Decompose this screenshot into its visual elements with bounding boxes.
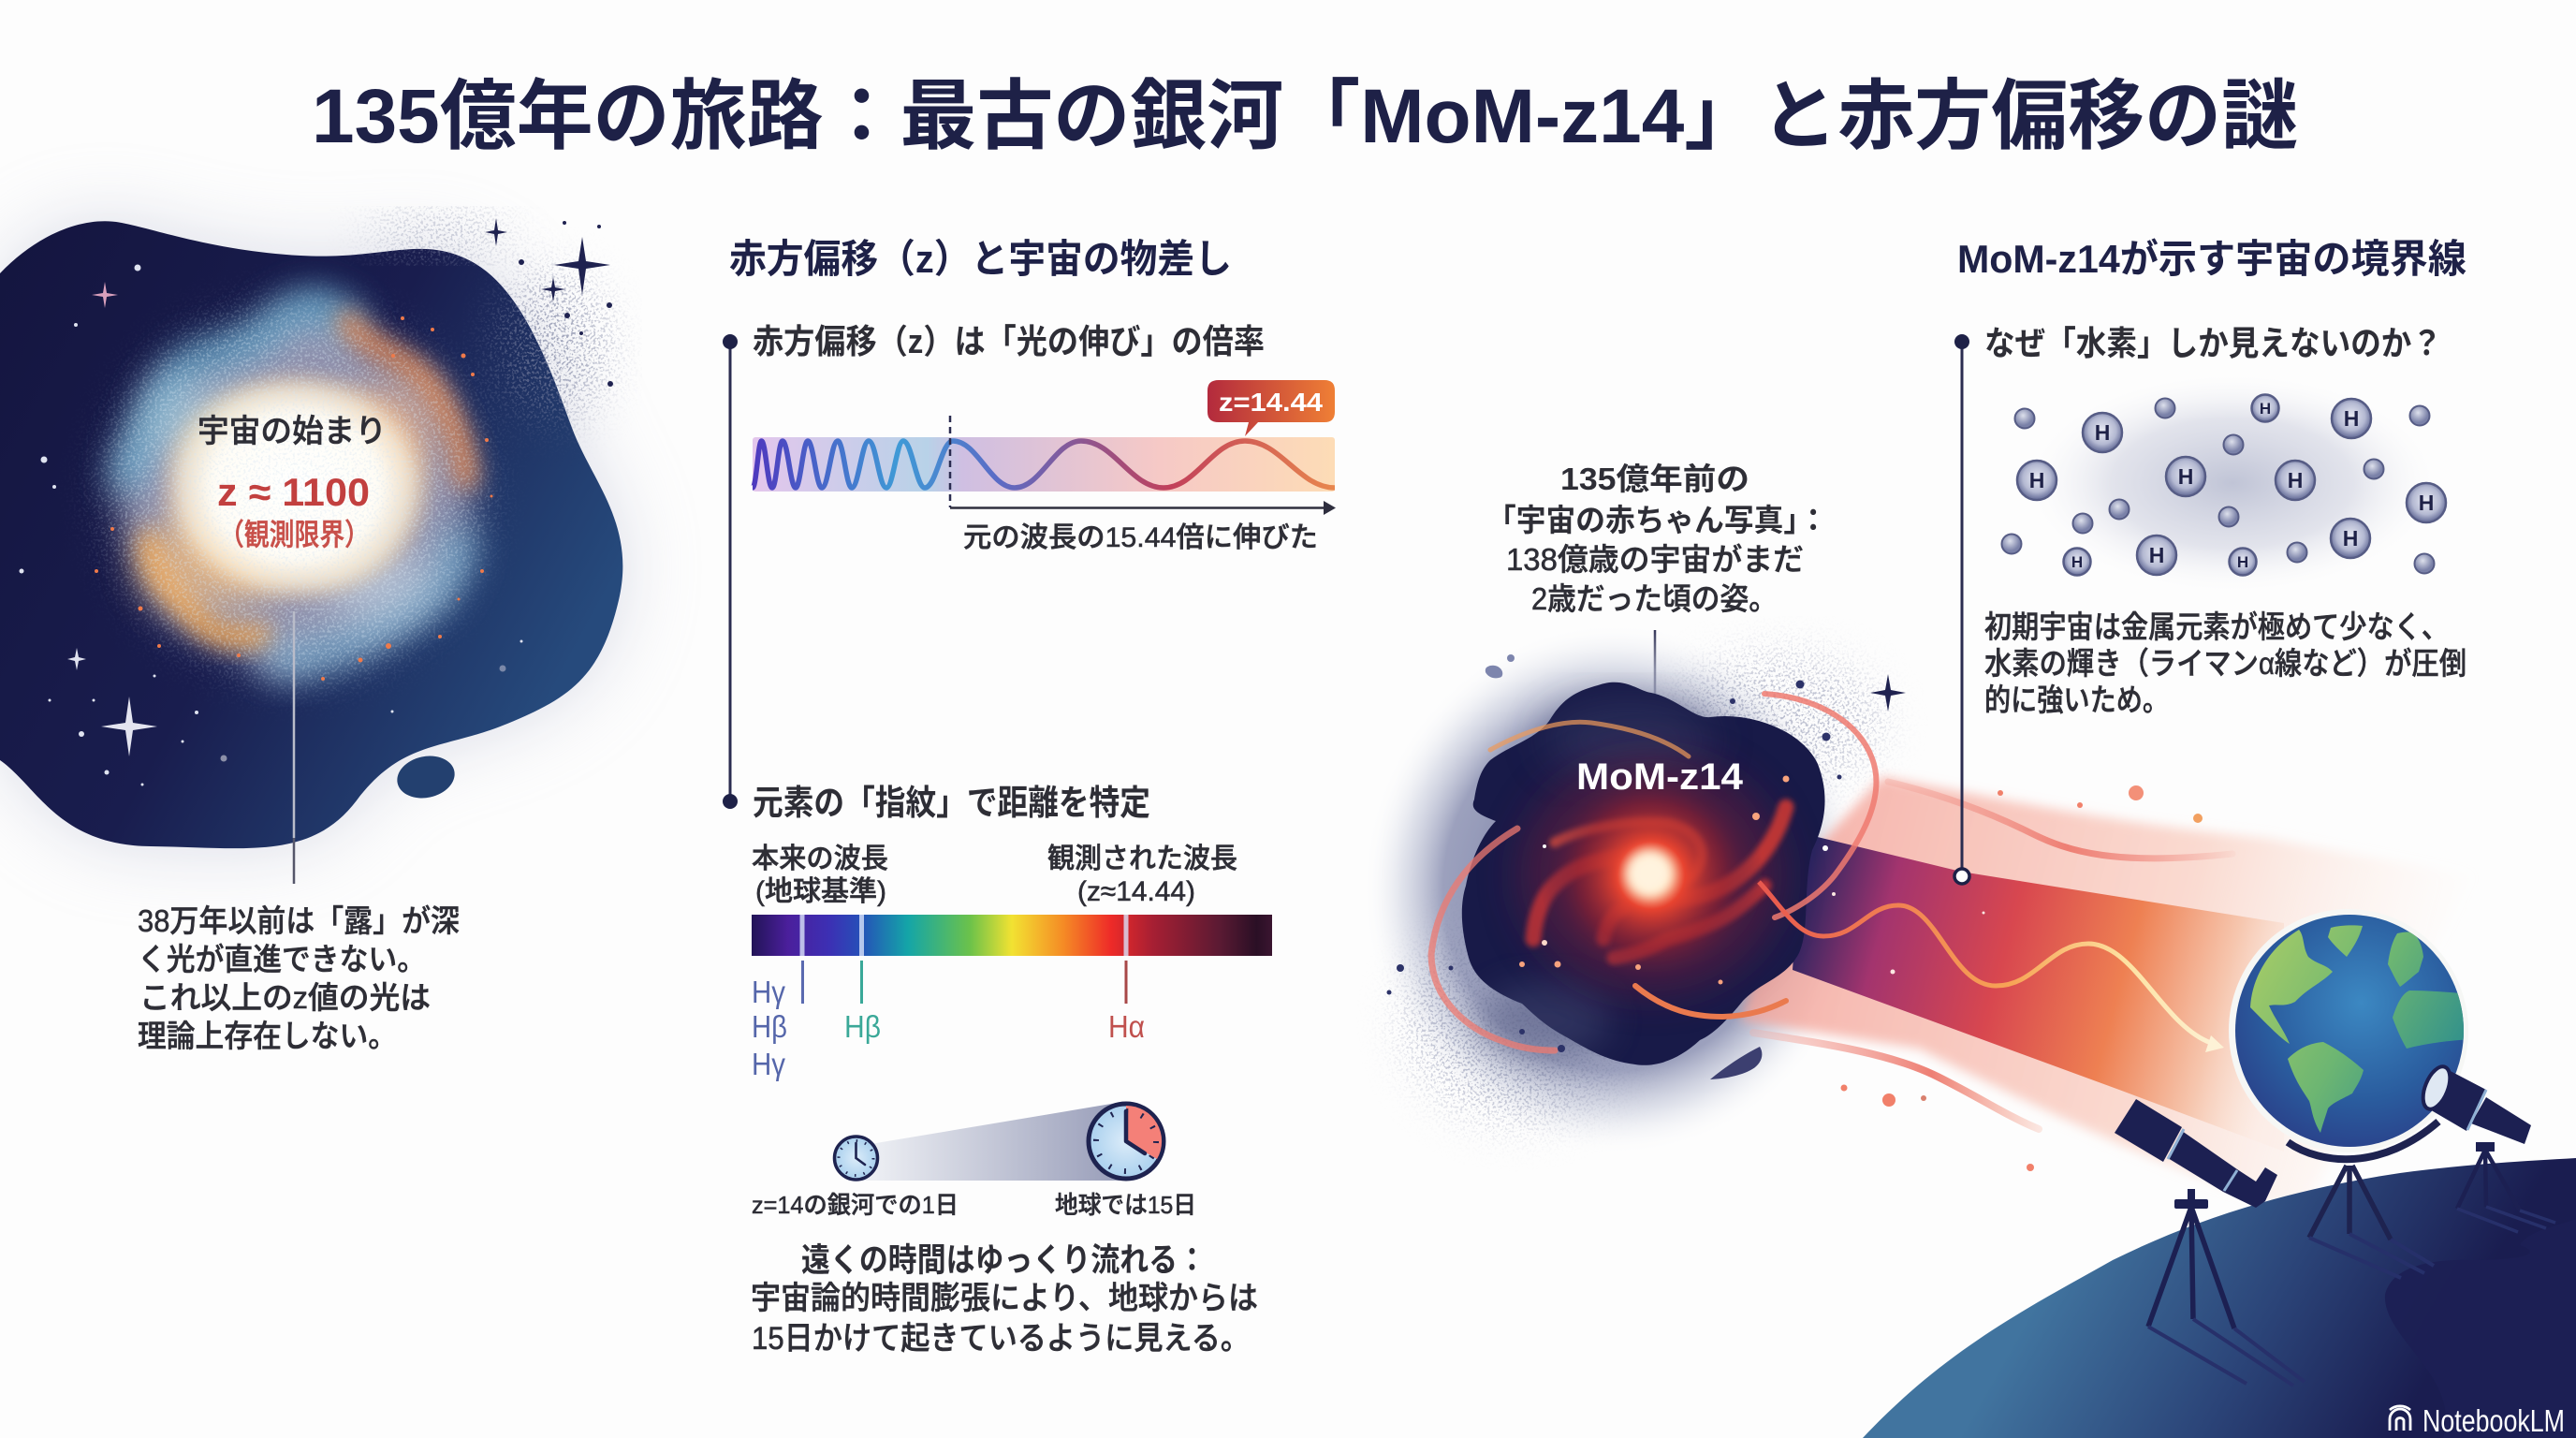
diagram: hydrogen atoms: H	[2344, 406, 2359, 431]
text: explanation of the fog: 38万年以前は「露」が深	[138, 903, 460, 938]
icon: right telescope	[2418, 1063, 2555, 1232]
panel: redshift and cosmic yardstick	[723, 237, 1336, 1357]
orbit streaks	[1431, 694, 1876, 1050]
continents	[2250, 925, 2471, 1133]
beam stars	[1832, 892, 1984, 974]
leader line	[293, 611, 295, 884]
callout: z=14.44: z=14.44	[1219, 388, 1323, 417]
text: hydrogen explanation: 水素の輝き（ライマンα線など）が圧倒	[1984, 646, 2466, 681]
label: rest wavelength: (地球基準)	[755, 876, 886, 907]
icon: small clock	[835, 1137, 878, 1180]
subheading: why only hydrogen: なぜ「水素」しか見えないのか？	[1984, 324, 2442, 362]
text: time dilation	[751, 1242, 1258, 1357]
galaxy sparks	[1519, 775, 1828, 985]
chart: spectrum	[752, 915, 1272, 1004]
spiral arms	[1533, 807, 1786, 958]
satellite blob	[393, 751, 459, 803]
dust speckle top	[365, 217, 515, 255]
icon: dark star top	[485, 218, 507, 246]
diagram: hydrogen atoms: H	[2149, 543, 2164, 567]
text: time dilation: 15日かけて起きているように見える。	[752, 1321, 1250, 1357]
label: z value: z ≈ 1100	[217, 470, 370, 514]
title: 135億年の旅路：最古の銀河「MoM-z14」と赤方偏移の謎	[312, 74, 2298, 159]
label: observed wavelength: 観測された波長	[1047, 844, 1237, 874]
labels: hydrogen lines: Hγ	[752, 975, 785, 1009]
blob glow	[0, 221, 622, 848]
labels: hydrogen lines: Hβ	[752, 1009, 787, 1044]
timeline	[723, 334, 738, 809]
chart: stretched wave	[753, 416, 1336, 515]
text: baby photo caption: 135億年前の	[1560, 462, 1749, 496]
dark dots	[519, 221, 613, 387]
ground hill shadow	[2385, 1219, 2576, 1438]
dark particles	[1387, 680, 1842, 1052]
small dot	[1507, 654, 1515, 662]
text: explanation of the fog: 理論上存在しない。	[138, 1019, 397, 1053]
dark drop	[1710, 1047, 1762, 1079]
diagram: hydrogen atoms: H	[2029, 468, 2044, 492]
beam halo	[1741, 777, 2471, 1212]
text: time dilation: 遠くの時間はゆっくり流れる：	[801, 1242, 1207, 1279]
diagram: hydrogen atoms: H	[2419, 491, 2434, 515]
leader line: galaxy	[1654, 630, 1656, 694]
text: hydrogen explanation: 初期宇宙は金属元素が極めて少なく、	[1984, 609, 2449, 644]
dust speckle right	[496, 271, 608, 421]
beam particles	[1840, 785, 2203, 1171]
callout: z=14.44	[1208, 380, 1335, 436]
label: one day in the galaxy: z=14の銀河での1日	[752, 1191, 959, 1219]
text: baby photo caption: 2歳だった頃の姿。	[1531, 581, 1778, 616]
labels: hydrogen lines: Hα	[1108, 1009, 1145, 1044]
text: baby photo caption: 「宇宙の赤ちゃん写真」：	[1486, 503, 1828, 537]
diagram: hydrogen atoms: H	[2343, 526, 2358, 550]
icon: left telescope	[2115, 1099, 2305, 1386]
label: MoM-z14: MoM-z14	[1576, 756, 1744, 798]
label: observation limit: （観測限界）	[219, 518, 370, 551]
diagram: hydrogen atoms	[2001, 375, 2446, 591]
panel: start of the universe	[0, 217, 622, 1053]
labels: hydrogen lines	[752, 975, 1145, 1081]
text: baby photo caption	[1486, 462, 1828, 616]
cosmic blob	[0, 221, 622, 848]
globe stand	[2288, 1122, 2438, 1278]
diagram: hydrogen atoms: H	[2288, 468, 2303, 492]
galaxy halo	[1362, 623, 1881, 1156]
diagram: hydrogen atoms: H	[2237, 553, 2248, 571]
text: hydrogen explanation	[1984, 609, 2466, 717]
leader: beam marker	[1954, 334, 1969, 884]
light beam	[1793, 833, 2284, 1152]
text: hydrogen explanation: 的に強いため。	[1984, 682, 2169, 717]
blob stars	[19, 264, 522, 786]
label: rest wavelength: 本来の波長	[752, 844, 888, 874]
text: explanation of the fog: く光が直進できない。	[138, 942, 426, 976]
diagram: hydrogen atoms: H	[2071, 553, 2083, 571]
icon: small white star	[67, 648, 86, 670]
diagram: hydrogen atoms: H	[2095, 420, 2110, 445]
label: fifteen days on earth: 地球では15日	[1055, 1191, 1196, 1219]
diagram: hydrogen atoms: H	[2178, 464, 2193, 489]
light wave arrow	[1759, 882, 2224, 1052]
label: observed wavelength: (z≈14.44)	[1077, 876, 1195, 907]
text: explanation of the fog: これ以上のz値の光は	[139, 980, 431, 1015]
ground planet	[1863, 1158, 2576, 1438]
heading: MoM-z14が示す宇宙の境界線	[1957, 237, 2466, 281]
icon: dark star large	[554, 237, 610, 295]
time dilation cone	[856, 1102, 1126, 1181]
caption: stretch factor: 元の波長の15.44倍に伸びた	[963, 522, 1318, 553]
subheading: element fingerprints: 元素の「指紋」で距離を特定	[753, 784, 1150, 822]
small drops	[1486, 666, 1502, 678]
label: observed wavelength	[1047, 844, 1237, 907]
panel: boundary of the universe	[1362, 237, 2576, 1438]
globe	[2229, 909, 2471, 1152]
labels: hydrogen lines: Hγ	[752, 1047, 785, 1081]
label: rest wavelength	[752, 844, 888, 907]
icon: pink star	[92, 282, 118, 308]
diagram: hydrogen atoms: H	[2260, 400, 2271, 418]
icon: white star	[101, 697, 157, 756]
heading: 赤方偏移（z）と宇宙の物差し	[729, 237, 1232, 281]
text: time dilation: 宇宙論的時間膨張により、地球からは	[751, 1281, 1258, 1316]
text: explanation of the fog	[138, 903, 460, 1053]
labels: hydrogen lines: Hβ	[844, 1009, 881, 1044]
nebula	[95, 304, 492, 681]
icon: dark star	[1870, 674, 1906, 712]
nebula sparks	[95, 316, 492, 681]
label: beginning of the universe: 宇宙の始まり	[198, 414, 387, 449]
text: baby photo caption: 138億歳の宇宙がまだ	[1506, 542, 1804, 577]
icon: dark star small	[541, 277, 565, 301]
subheading: stretching of light: 赤方偏移（z）は「光の伸び」の倍率	[753, 322, 1265, 360]
beam streaks	[1753, 782, 2232, 1129]
galaxy	[1387, 654, 1906, 1079]
icon: large clock	[1089, 1104, 1164, 1179]
